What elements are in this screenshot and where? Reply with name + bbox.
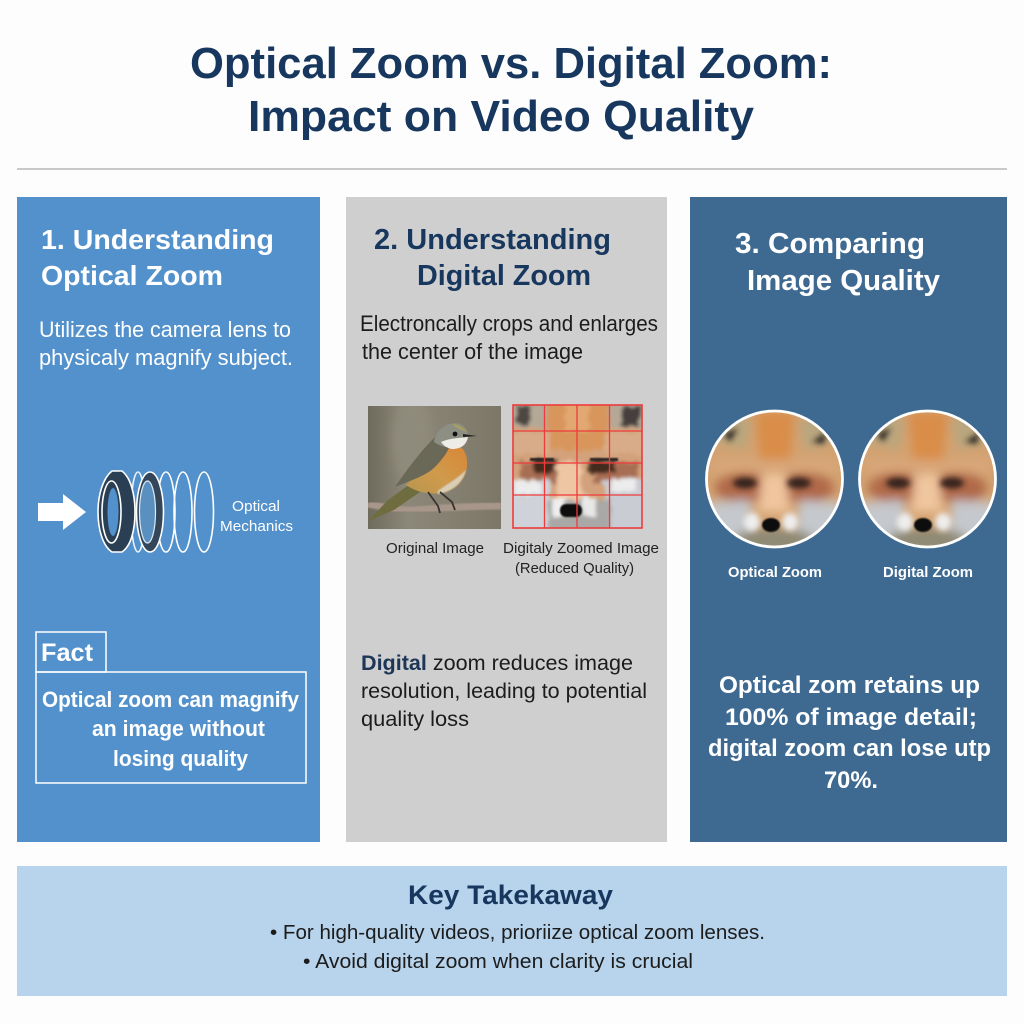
- image: original bird photo: [368, 395, 501, 529]
- label: digital zoom: Digital Zoom: [883, 565, 973, 581]
- heading: panel 2: Digital Zoom: [417, 260, 591, 292]
- label: original image: Original Image: [386, 541, 484, 557]
- heading: panel 3: 3. Comparing: [735, 228, 925, 260]
- text: quality comparison: 70%.: [824, 767, 878, 794]
- text: takeaway bullets: [270, 922, 765, 973]
- text: quality comparison: digital zoom can lose utp: [708, 735, 991, 762]
- heading: panel 1: Optical Zoom: [41, 260, 223, 291]
- title: Impact on Video Quality: [248, 92, 755, 141]
- belly: [406, 442, 467, 494]
- text: takeaway bullets: • Avoid digital zoom when clarity is crucial: [303, 951, 693, 973]
- panel: understanding optical zoom: [17, 197, 320, 842]
- text: digital zoom quality loss: quality loss: [361, 708, 469, 731]
- image: digital zoom fox: [853, 411, 1001, 552]
- icon: arrow into lens: [38, 494, 86, 530]
- image: digitally zoomed fox with grid: [512, 404, 643, 529]
- head: [434, 423, 468, 448]
- branch: [368, 504, 501, 510]
- heading: panel 2: [374, 224, 611, 292]
- panel: key takeaway: [17, 866, 1007, 996]
- text: quality comparison: [708, 672, 991, 794]
- label: optical mechanics: Optical: [232, 499, 280, 515]
- callout: fact: an image without: [92, 716, 266, 741]
- heading: panel 3: Image Quality: [747, 265, 940, 297]
- wing and back: [395, 437, 449, 487]
- text: optical zoom description: Utilizes the camera lens to: [39, 317, 291, 342]
- heading: key takeaway: Key Takekaway: [408, 880, 613, 910]
- text: optical zoom description: physicaly magnify subject.: [39, 345, 293, 370]
- text: optical zoom description: [39, 317, 293, 370]
- label: optical mechanics: Mechanics: [220, 519, 293, 535]
- callout: fact: [36, 632, 306, 783]
- callout: fact: Optical zoom can magnify: [42, 687, 300, 712]
- heading: panel 3: [735, 228, 940, 297]
- text: digital zoom description: [360, 311, 658, 364]
- heading: panel 1: 1. Understanding: [41, 224, 274, 255]
- label: optical mechanics: [220, 499, 293, 535]
- callout: fact: losing quality: [113, 746, 249, 771]
- label: digitally zoomed image: Digitaly Zoomed Image: [503, 541, 659, 557]
- icon: lens elements: [98, 471, 214, 552]
- heading: panel 2: 2. Understanding: [374, 224, 611, 256]
- label: optical zoom: Optical Zoom: [728, 565, 822, 581]
- image: optical zoom fox: [700, 411, 848, 552]
- text: digital zoom quality loss: Digital zoom reduces image: [361, 652, 633, 675]
- legs: [428, 492, 455, 513]
- text: digital zoom description: the center of the image: [362, 339, 583, 364]
- label: digitally zoomed image: [503, 541, 659, 577]
- tail: [368, 484, 420, 521]
- text: quality comparison: 100% of image detail;: [725, 704, 977, 731]
- title: [190, 39, 832, 141]
- callout: fact: Fact: [41, 639, 94, 667]
- text: takeaway bullets: • For high-quality videos, prioriize optical zoom lenses.: [270, 922, 765, 944]
- label: digitally zoomed image: (Reduced Quality): [515, 561, 634, 577]
- heading: panel 1: [41, 224, 274, 291]
- panel: understanding digital zoom: [346, 197, 667, 842]
- text: digital zoom description: Electroncally crops and enlarges: [360, 311, 658, 336]
- text: digital zoom quality loss: resolution, leading to potential: [361, 680, 647, 703]
- title: Optical Zoom vs. Digital Zoom:: [190, 39, 832, 88]
- panel: comparing image quality: [690, 197, 1007, 842]
- text: quality comparison: Optical zom retains up: [719, 672, 980, 699]
- text: digital zoom quality loss: [361, 652, 647, 731]
